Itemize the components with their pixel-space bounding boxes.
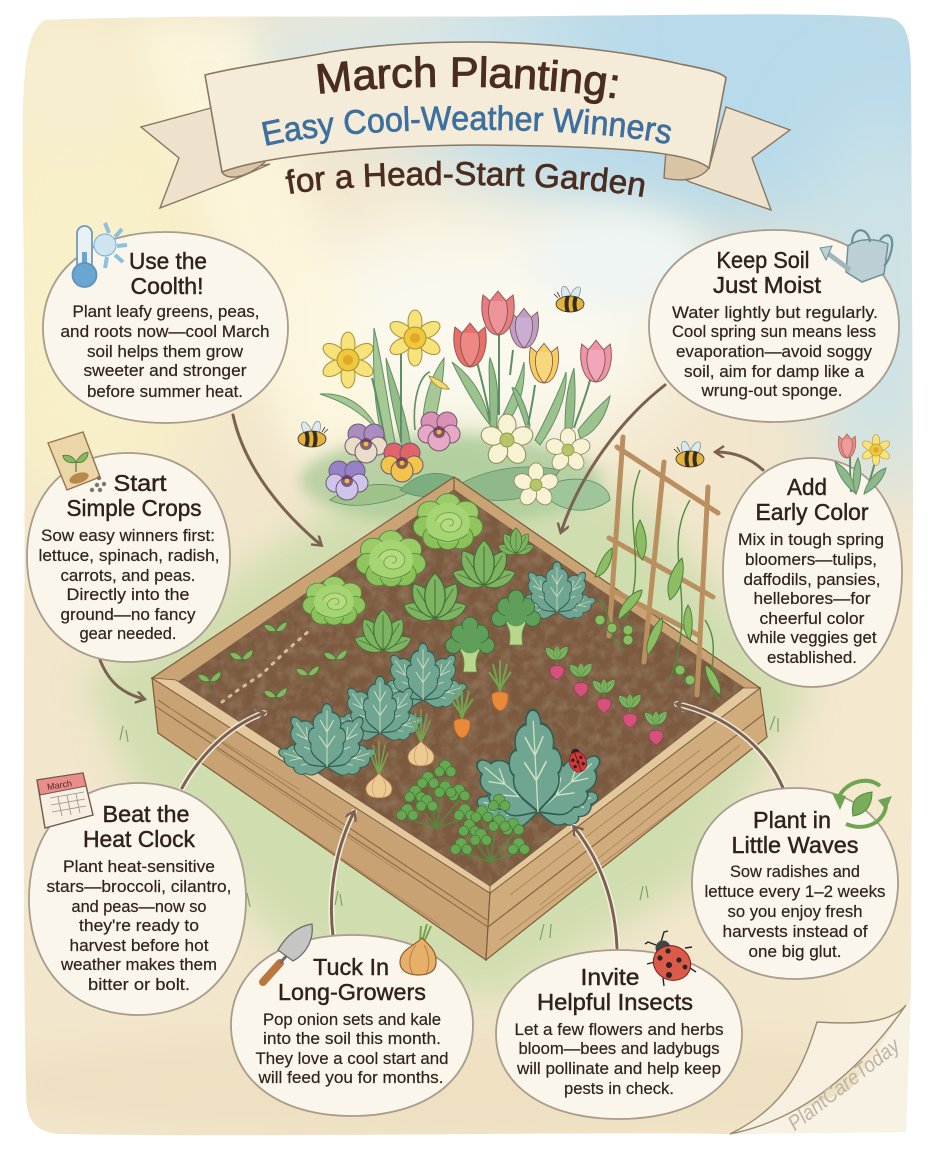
body text: Water lightly but regularly. [672, 303, 878, 322]
heading: Little Waves [732, 832, 858, 858]
title ribbon [140, 41, 792, 211]
body text: Sow radishes and [730, 862, 860, 881]
onions [366, 709, 434, 798]
page curl [730, 1005, 906, 1134]
front right wood face [486, 688, 767, 960]
seedlings and seed row [198, 622, 347, 706]
arrow: use the coolth [233, 415, 321, 545]
ribbon band [205, 42, 726, 172]
bubble [29, 783, 246, 1015]
heading [278, 954, 426, 1005]
body text: daffodils, pansies, [744, 570, 880, 589]
body text: Plant heat-sensitive [63, 857, 215, 876]
body text: harvest before hot [70, 936, 209, 955]
heading: Tuck In [313, 954, 389, 980]
heading [756, 474, 869, 525]
tulips [454, 291, 611, 383]
daffodils [320, 310, 449, 389]
body text: evaporation—avoid soggy [676, 342, 872, 361]
carrots [451, 660, 511, 738]
heading [537, 964, 693, 1015]
body text: lettuce, spinach, radish, [38, 546, 220, 565]
spinach [352, 528, 535, 656]
heading: Helpful Insects [537, 989, 693, 1015]
front left wood face [152, 678, 490, 960]
foliage and stems [320, 328, 610, 458]
body text: hellebores—for [754, 589, 871, 608]
icon: watering can [820, 230, 892, 282]
ribbon tails [141, 107, 790, 210]
panel: start simple crops [27, 432, 230, 662]
body text: will feed you for months. [257, 1068, 444, 1087]
panel: tuck in long-growers [231, 924, 473, 1116]
grass wash around garden bed [85, 430, 810, 1000]
bubble [649, 230, 899, 422]
arrow: start simple crops [100, 660, 144, 699]
cilantro [396, 760, 530, 862]
body text: into the soil this month. [263, 1029, 441, 1048]
body text: They love a cool start and [256, 1049, 448, 1068]
heading: Just Moist [713, 272, 821, 298]
pansies [326, 412, 460, 500]
arrow: add early color [716, 452, 763, 470]
heading: Beat the [102, 801, 190, 827]
body text: while veggies get [747, 628, 877, 647]
body text: before summer heat. [87, 382, 243, 401]
bees [298, 285, 704, 467]
panel: add early color [723, 434, 902, 687]
icon: thermometer and sun [72, 223, 127, 287]
body text: and roots now—cool March [60, 322, 270, 341]
body text: Directly into the [66, 585, 190, 604]
heading [83, 801, 195, 852]
body text: wrung-out sponge. [700, 381, 842, 400]
heading [66, 470, 202, 521]
body text [256, 1010, 448, 1087]
icon: seed packet [48, 432, 106, 492]
bubble [231, 935, 473, 1116]
heading: Add [787, 474, 827, 500]
icon: trowel [263, 924, 312, 982]
bubble [496, 950, 742, 1119]
title line 1: March Planting: [317, 56, 618, 104]
panel: plant in little waves [692, 781, 898, 979]
icon: tulip and daffodil [835, 434, 891, 494]
heading: Invite [580, 964, 640, 990]
heading: Long-Growers [278, 979, 426, 1005]
body text: established. [767, 648, 857, 667]
body text: stars—broccoli, cilantro, [46, 877, 231, 896]
hellebores [479, 414, 592, 508]
back rim [152, 477, 760, 690]
body text: and peas—now so [72, 897, 206, 916]
body text: Mix in tough spring [738, 530, 884, 549]
arrow: invite helpful insects [574, 827, 617, 948]
flower garden behind bed [298, 285, 704, 510]
body text: so you enjoy fresh [728, 902, 862, 921]
large kale with ladybug [463, 708, 615, 833]
heading [732, 807, 858, 858]
body text: soil, aim for damp like a [684, 362, 865, 381]
body text: Sow easy winners first: [41, 526, 215, 545]
body text: bitter or bolt. [88, 975, 190, 994]
body text: Pop onion sets and kale [263, 1010, 441, 1029]
icon: calendar: March [46, 778, 73, 792]
body text: Plant leafy greens, peas, [72, 302, 260, 321]
body text: bloom—bees and ladybugs [518, 1039, 720, 1058]
body text: carrots, and peas. [60, 566, 196, 585]
icon: calendar [37, 773, 93, 828]
arrows to garden bed [100, 385, 783, 948]
body text: gear needed. [80, 624, 176, 643]
bubble [723, 458, 902, 687]
body text: harvests instead of [722, 922, 868, 941]
body text [38, 526, 220, 643]
bubble [692, 788, 898, 979]
arrow: beat the heat clock [182, 713, 264, 788]
icon: cycle arrows [832, 781, 892, 827]
body text: soil helps them grow [87, 342, 244, 361]
heading: Heat Clock [83, 826, 195, 852]
panel: invite helpful insects [496, 931, 742, 1119]
body text [738, 530, 884, 667]
raised garden bed [152, 437, 767, 960]
icon: onion [400, 924, 436, 975]
body text: bloomers—tulips, [745, 550, 877, 569]
body text: lettuce every 1–2 weeks [704, 882, 886, 901]
panel: beat the heat clock [29, 773, 246, 1015]
body text [704, 862, 886, 961]
body text: they're ready to [79, 916, 199, 935]
body text: Let a few flowers and herbs [514, 1020, 724, 1039]
soil [176, 490, 745, 890]
body text: one big glut. [748, 942, 842, 961]
panel: use the coolth [43, 223, 288, 423]
icon: ladybug [645, 931, 696, 986]
heading: Start [114, 470, 167, 496]
heading: Plant in [753, 807, 831, 833]
heading [713, 247, 821, 298]
body text: ground—no fancy [60, 605, 196, 624]
title line 2: Easy Cool-Weather Winners [262, 104, 672, 146]
broccoli [446, 590, 540, 672]
radishes [543, 644, 670, 745]
body text: Cool spring sun means less [672, 322, 876, 341]
body text: pests in check. [564, 1079, 674, 1098]
body text [46, 857, 231, 994]
heading: Coolth! [130, 273, 204, 299]
heading: Simple Crops [66, 495, 202, 521]
arrow: keep soil just moist [561, 385, 665, 532]
heading: Early Color [756, 499, 869, 525]
heading [129, 248, 207, 299]
body text [672, 303, 878, 400]
kale rows [274, 562, 599, 781]
watermark: PlantCareToday [784, 1033, 905, 1135]
panel: keep soil just moist [649, 230, 899, 422]
title line 3: for a Head-Start Garden [285, 160, 644, 198]
heading: Keep Soil [716, 247, 810, 273]
body text [60, 302, 270, 401]
bubble [27, 453, 230, 662]
arrow: plant in little waves [677, 704, 783, 788]
bubble [43, 232, 288, 423]
arrow: tuck in long-growers [331, 812, 354, 936]
body text [514, 1020, 724, 1098]
heading: Use the [129, 248, 207, 274]
body text: weather makes them [60, 955, 217, 974]
body text: will pollinate and help keep [516, 1059, 721, 1078]
body text: sweeter and stronger [84, 361, 247, 380]
lettuce [303, 494, 483, 625]
pea trellis [595, 437, 720, 700]
body text: cheerful color [760, 609, 865, 628]
